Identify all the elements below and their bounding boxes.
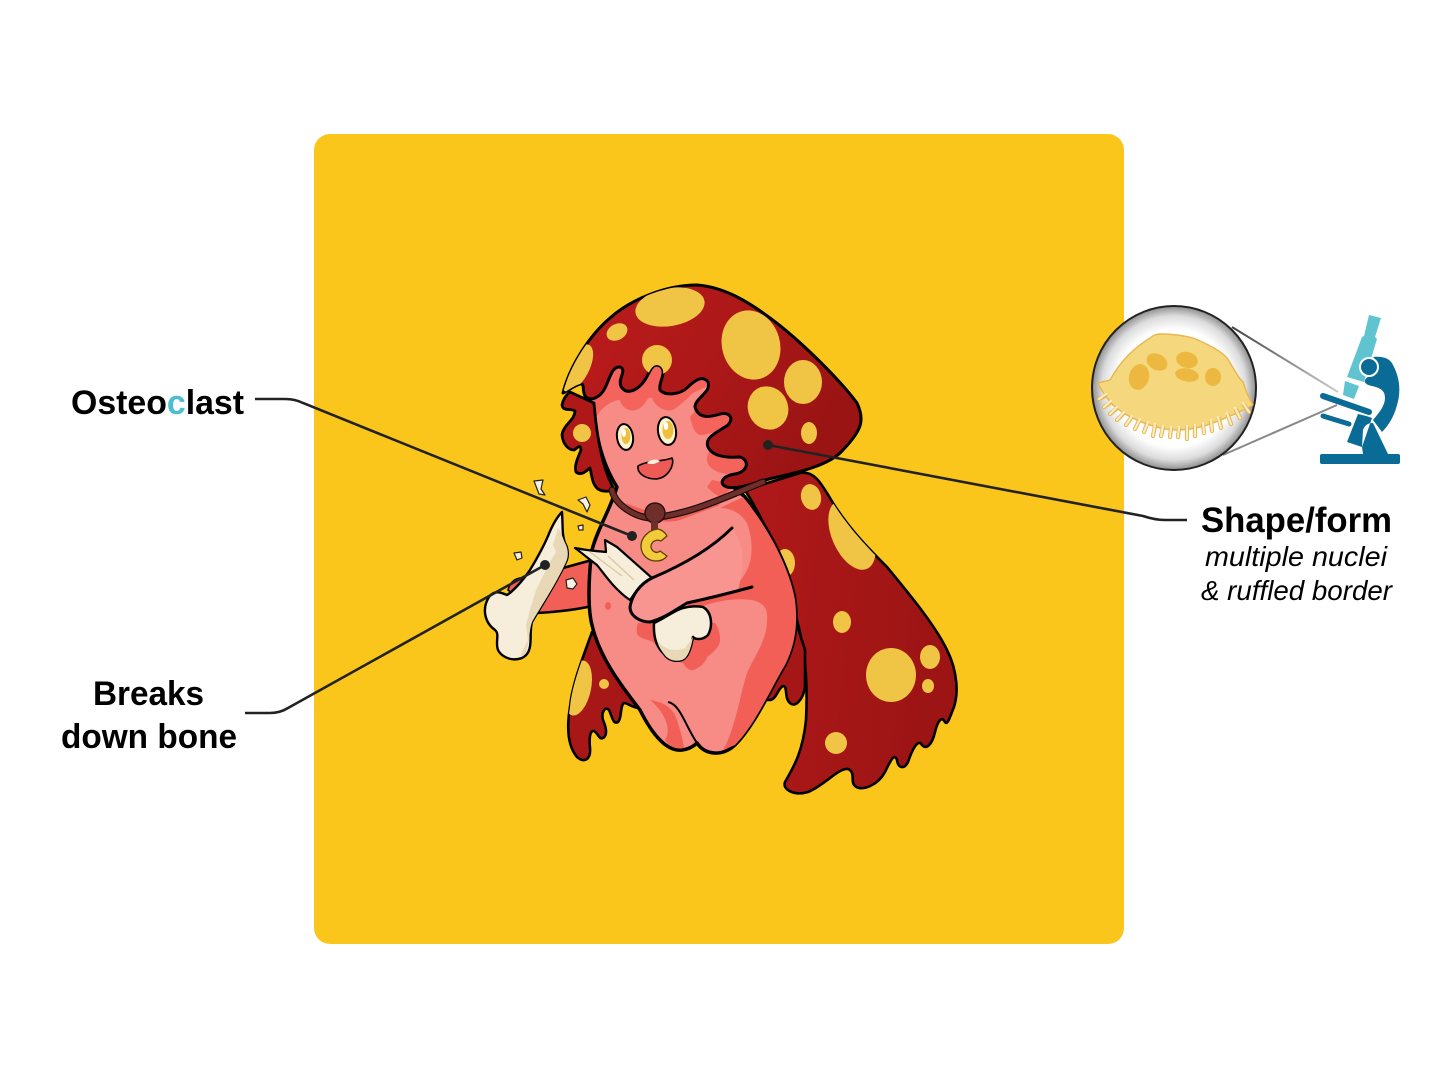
infographic canvas [62, 134, 1400, 944]
hair shadow on face [590, 350, 750, 497]
necklace with C pendant [612, 482, 763, 561]
eyes [615, 416, 678, 451]
hood spots [554, 282, 822, 444]
magnification cone lines [1223, 327, 1338, 455]
label: Breaks down bone [61, 675, 237, 756]
broken bone: left [485, 512, 568, 659]
leader line: breaks down bone [245, 560, 550, 713]
panel: yellow background [314, 134, 1124, 944]
bone shadow on belly [637, 623, 720, 670]
bone fragments [514, 480, 624, 596]
front arm [630, 528, 752, 622]
cape: small drip between body and cape [760, 625, 805, 705]
body shading [687, 497, 796, 750]
label: Breaks down bone: Breaks [93, 675, 204, 713]
label: Shape/form with details: multiple nuclei [1205, 541, 1388, 572]
mouth [638, 458, 673, 479]
broken bone: held in hand [575, 540, 652, 600]
cape: left side [559, 632, 640, 760]
hood [554, 282, 861, 491]
body and head [589, 350, 796, 753]
leader line: osteoclast [255, 399, 637, 541]
cell with ruffled border [1098, 334, 1253, 430]
nuclei [1126, 350, 1221, 392]
label: Shape/form with details [1201, 501, 1394, 606]
label: Breaks down bone: down bone [61, 718, 237, 756]
leg crease [650, 700, 684, 748]
small blush mark [605, 602, 611, 610]
leader line: shape and form [763, 440, 1187, 520]
label: Shape/form with details: & ruffled border [1201, 575, 1394, 606]
bone: right hand [654, 606, 711, 661]
label: Shape/form with details: Shape/form [1201, 501, 1392, 540]
illustration: osteoclast character [485, 282, 957, 793]
magnified cell in lens [1092, 306, 1256, 470]
label: Osteoclast: Osteoclast [71, 384, 244, 422]
neck shading [625, 500, 720, 522]
icon: microscope [1320, 315, 1400, 464]
cape: main right side [745, 473, 957, 793]
back arm holding bone [508, 560, 592, 613]
